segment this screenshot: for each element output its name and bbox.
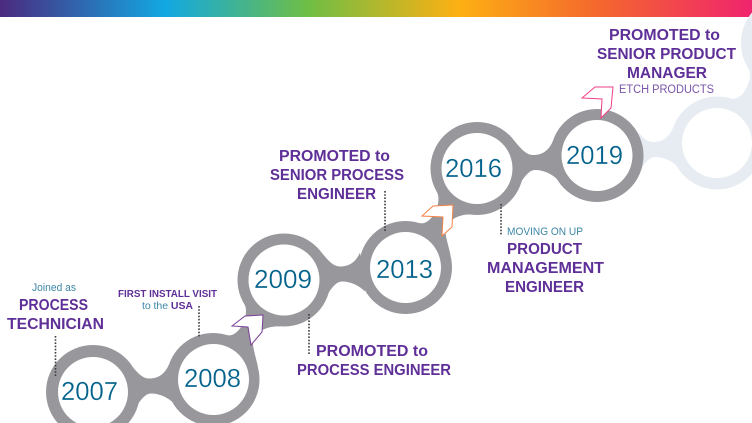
year 2013: 2013 bbox=[376, 254, 433, 284]
arrow: pink bbox=[582, 87, 613, 118]
arrow: purple bbox=[232, 315, 263, 345]
caption 2013: SENIOR PROCESS bbox=[270, 167, 404, 184]
caption 2007 bbox=[7, 282, 104, 333]
caption 2013 bbox=[270, 148, 404, 203]
arrow: orange bbox=[422, 205, 453, 236]
leader line 2008 bbox=[198, 306, 200, 337]
caption 2009: PROCESS ENGINEER bbox=[297, 362, 451, 379]
caption 2008 bbox=[118, 288, 218, 312]
leader line 2009 bbox=[308, 314, 310, 354]
caption 2019: PROMOTED to bbox=[609, 27, 720, 44]
caption 2019: ETCH PRODUCTS bbox=[619, 84, 714, 96]
caption 2007: Joined as bbox=[32, 282, 76, 294]
leader line 2016 bbox=[500, 204, 502, 235]
caption 2009: PROMOTED to bbox=[316, 343, 428, 360]
leader line 2013 bbox=[384, 191, 386, 231]
caption 2016: MOVING ON UP bbox=[507, 226, 583, 238]
caption 2008: to the USA bbox=[142, 300, 193, 312]
caption 2019: MANAGER bbox=[627, 65, 707, 82]
caption 2008: FIRST INSTALL VISIT bbox=[118, 288, 218, 300]
future path: light grey circles bbox=[631, 0, 752, 190]
year 2007: 2007 bbox=[61, 376, 118, 406]
caption 2007: TECHNICIAN bbox=[7, 316, 104, 333]
leader line 2007 bbox=[54, 336, 56, 376]
caption 2019: SENIOR PRODUCT bbox=[597, 46, 736, 63]
caption 2016: MANAGEMENT bbox=[487, 260, 604, 277]
caption 2016: ENGINEER bbox=[505, 279, 584, 296]
caption 2013: ENGINEER bbox=[297, 186, 376, 203]
year 2009: 2009 bbox=[254, 264, 312, 294]
caption 2007: PROCESS bbox=[19, 297, 88, 314]
caption 2016 bbox=[487, 226, 604, 296]
caption 2016: PRODUCT bbox=[507, 241, 582, 258]
caption 2013: PROMOTED to bbox=[279, 148, 390, 165]
year 2008: 2008 bbox=[184, 363, 241, 393]
timeline chain: grey rings and connectors bbox=[46, 109, 644, 423]
year 2019: 2019 bbox=[566, 140, 623, 170]
rainbow header bar bbox=[0, 0, 752, 17]
caption 2019 bbox=[597, 27, 736, 96]
caption 2009 bbox=[297, 343, 451, 379]
year 2016: 2016 bbox=[445, 153, 502, 183]
